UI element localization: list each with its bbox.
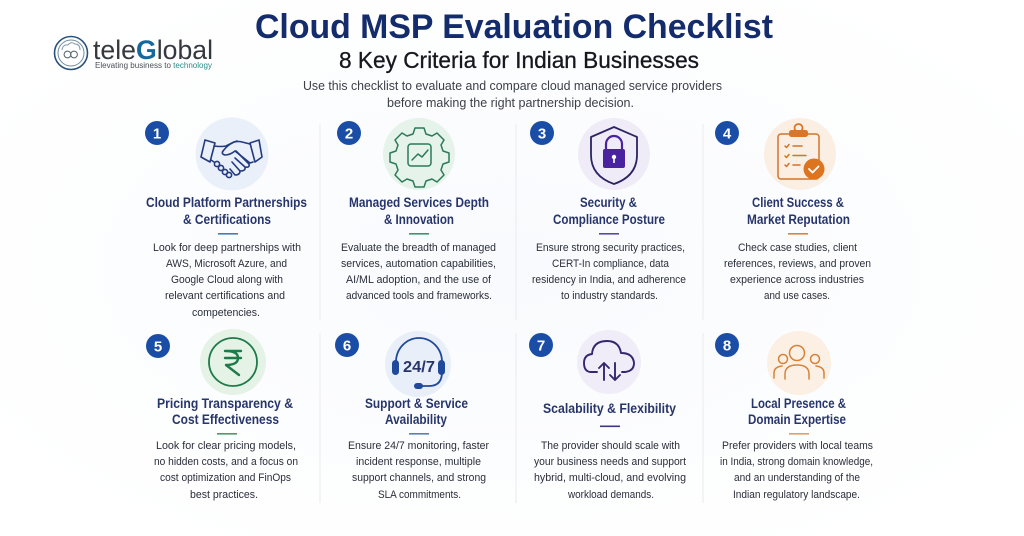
- number badge 7: [529, 333, 553, 357]
- number badge 5: [146, 334, 170, 358]
- body text: [348, 440, 489, 501]
- body text: best practices.: [190, 489, 258, 501]
- body text: Ensure strong security practices,: [536, 242, 685, 254]
- body text: The provider should scale with: [541, 440, 680, 452]
- body text: workload demands.: [567, 489, 654, 501]
- body text: Google Cloud along with: [171, 274, 283, 286]
- logo: teleGlobal: [54, 35, 213, 70]
- body text: and use cases.: [764, 290, 830, 302]
- body text: [154, 440, 298, 501]
- icon: cloud with arrows: [577, 330, 641, 394]
- body text: support channels, and strong: [352, 472, 486, 484]
- icon: clipboard with check: [764, 118, 836, 190]
- number badge 6: 6: [343, 338, 351, 354]
- body text: no hidden costs, and a focus on: [154, 456, 298, 468]
- panel: 2 managed services depth: [337, 118, 496, 302]
- body text: competencies.: [192, 307, 260, 319]
- intro text: Use this checklist to evaluate and compare cloud managed service providers: [303, 79, 722, 93]
- heading: Market Reputation: [747, 212, 850, 227]
- body text: advanced tools and frameworks.: [346, 290, 492, 302]
- heading: [146, 195, 307, 227]
- body text: Check case studies, client: [738, 242, 857, 254]
- body text: [724, 242, 871, 302]
- heading: [157, 396, 293, 427]
- icon: headset 24/7: 24/7: [403, 359, 435, 376]
- number badge 1: 1: [153, 126, 161, 142]
- heading: & Innovation: [384, 212, 454, 227]
- body text: hybrid, multi-cloud, and evolving: [534, 472, 686, 484]
- icon: people group: [767, 331, 831, 395]
- heading: [553, 195, 665, 227]
- heading: Cloud Platform Partnerships: [146, 195, 307, 210]
- heading: Domain Expertise: [748, 412, 846, 427]
- intro text: before making the right partnership decision.: [387, 96, 634, 110]
- icon: handshake: [196, 118, 268, 190]
- intro text: [303, 79, 722, 110]
- number badge 2: 2: [345, 126, 353, 142]
- number badge 6: [335, 333, 359, 357]
- heading: Scalability & Flexibility: [543, 401, 676, 416]
- body text: references, reviews, and proven: [724, 258, 871, 270]
- body text: CERT-In compliance, data: [552, 258, 670, 270]
- body text: [534, 440, 686, 501]
- number badge 8: [715, 333, 739, 357]
- panel: 4 client success: [715, 118, 871, 302]
- panel: 1 cloud platform partnerships: [145, 118, 307, 319]
- logo: teleGlobal: teleGlobal: [93, 35, 213, 65]
- panel: 6 support availability: [335, 331, 489, 501]
- logo: teleGlobal: Elevating business to technology: [95, 61, 212, 70]
- body text: Look for clear pricing models,: [156, 440, 296, 452]
- number badge 2: [337, 121, 361, 145]
- heading: Availability: [385, 412, 447, 427]
- panel: 3 security and compliance: [530, 118, 686, 302]
- body text: AI/ML adoption, and the use of: [346, 274, 492, 286]
- heading: Managed Services Depth: [349, 195, 489, 210]
- heading: [365, 396, 468, 427]
- body text: Look for deep partnerships with: [153, 242, 301, 254]
- body text: [532, 242, 686, 302]
- body text: Ensure 24/7 monitoring, faster: [348, 440, 489, 452]
- heading: [747, 195, 850, 227]
- body text: and an understanding of the: [734, 472, 860, 484]
- icon: gear with chart: [383, 118, 455, 190]
- heading: Support & Service: [365, 396, 468, 411]
- heading: [349, 195, 489, 227]
- number badge 1: [145, 121, 169, 145]
- icon: shield with lock: [578, 118, 650, 190]
- body text: residency in India, and adherence: [532, 274, 686, 286]
- panel: 8 local presence: [715, 331, 873, 501]
- body text: services, automation capabilities,: [341, 258, 496, 270]
- number badge 3: [530, 121, 554, 145]
- body text: your business needs and support: [534, 456, 686, 468]
- body text: in India, strong domain knowledge,: [720, 456, 873, 468]
- body text: [720, 440, 873, 501]
- number badge 4: 4: [723, 126, 732, 142]
- heading: Security &: [580, 195, 637, 210]
- number badge 5: 5: [154, 338, 162, 356]
- heading: Client Success &: [752, 195, 844, 210]
- heading: [748, 396, 846, 427]
- number badge 3: 3: [538, 126, 546, 142]
- panel: 7 scalability: [529, 330, 686, 501]
- icon: rupee: [200, 329, 266, 395]
- heading: Cost Effectiveness: [172, 412, 279, 427]
- number badge 7: 7: [537, 338, 545, 354]
- icon: headset 24/7: [385, 331, 451, 397]
- body text: SLA commitments.: [378, 489, 461, 501]
- body text: AWS, Microsoft Azure, and: [166, 258, 287, 270]
- body text: relevant certifications and: [165, 290, 285, 302]
- body text: experience across industries: [730, 274, 864, 286]
- title: Cloud MSP Evaluation Checklist: [255, 8, 773, 46]
- body text: Indian regulatory landscape.: [733, 489, 860, 501]
- heading: Pricing Transparency &: [157, 396, 293, 411]
- panel: 5 pricing transparency: [146, 329, 298, 501]
- body text: [341, 242, 496, 302]
- heading: Compliance Posture: [553, 212, 665, 227]
- body text: [153, 242, 301, 319]
- body text: cost optimization and FinOps: [160, 472, 291, 484]
- body text: Evaluate the breadth of managed: [341, 242, 496, 254]
- body text: to industry standards.: [561, 290, 658, 302]
- body text: Prefer providers with local teams: [722, 440, 873, 452]
- number badge 8: 8: [723, 338, 731, 354]
- subtitle: 8 Key Criteria for Indian Businesses: [339, 47, 699, 73]
- heading: Local Presence &: [751, 396, 846, 411]
- body text: incident response, multiple: [356, 456, 481, 468]
- heading: & Certifications: [183, 212, 271, 227]
- number badge 4: [715, 121, 739, 145]
